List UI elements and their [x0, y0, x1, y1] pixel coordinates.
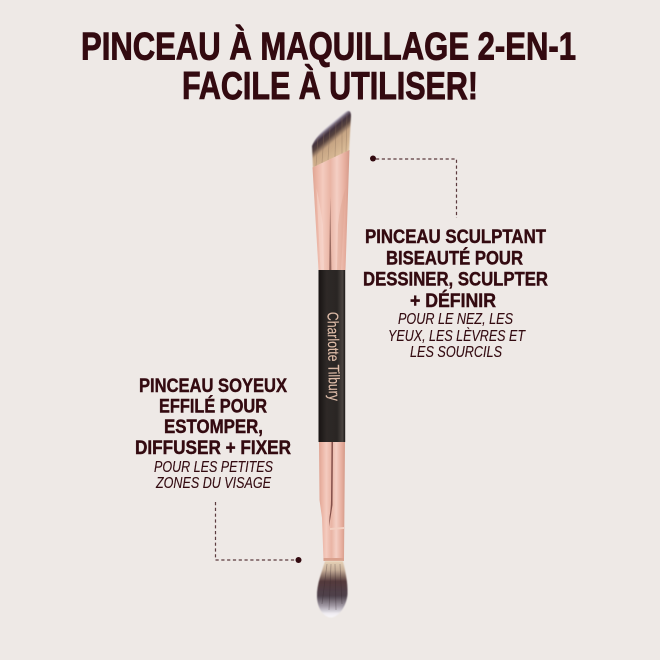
angled bristles	[312, 111, 351, 168]
text block: blending brush: PINCEAU SOYEUX	[139, 375, 288, 397]
title: FACILE À UTILISER!	[182, 64, 478, 108]
title	[81, 24, 576, 108]
text block: blending brush: POUR LES PETITES	[154, 459, 273, 476]
text block: sculpting brush: YEUX, LES LÈVRES ET	[388, 326, 526, 345]
lower ferrule	[319, 442, 345, 561]
text block: sculpting brush: + DÉFINIR	[410, 289, 496, 312]
logo: Charlotte Tilbury	[324, 312, 342, 401]
upper ferrule	[312, 150, 350, 270]
text block: sculpting brush	[363, 226, 548, 361]
fluffy bristles	[317, 561, 348, 618]
text block: blending brush: ZONES DU VISAGE	[155, 475, 271, 492]
handle	[318, 270, 345, 442]
text block: sculpting brush: PINCEAU SCULPTANT	[365, 226, 546, 248]
illustration: double-ended brush	[312, 111, 351, 618]
connector: angled brush callout	[370, 156, 456, 218]
connector: fluffy brush callout	[216, 502, 302, 563]
text block: sculpting brush: POUR LE NEZ, LES	[398, 311, 513, 328]
text block: sculpting brush: LES SOURCILS	[410, 344, 502, 361]
text block: sculpting brush: DESSINER, SCULPTER	[363, 268, 548, 290]
text block: blending brush: EFFILÉ POUR	[159, 394, 267, 418]
text block: blending brush: ESTOMPER,	[164, 416, 263, 438]
text block: blending brush	[135, 375, 291, 492]
text block: blending brush: DIFFUSER + FIXER	[135, 437, 291, 459]
text block: sculpting brush: BISEAUTÉ POUR	[386, 246, 523, 270]
